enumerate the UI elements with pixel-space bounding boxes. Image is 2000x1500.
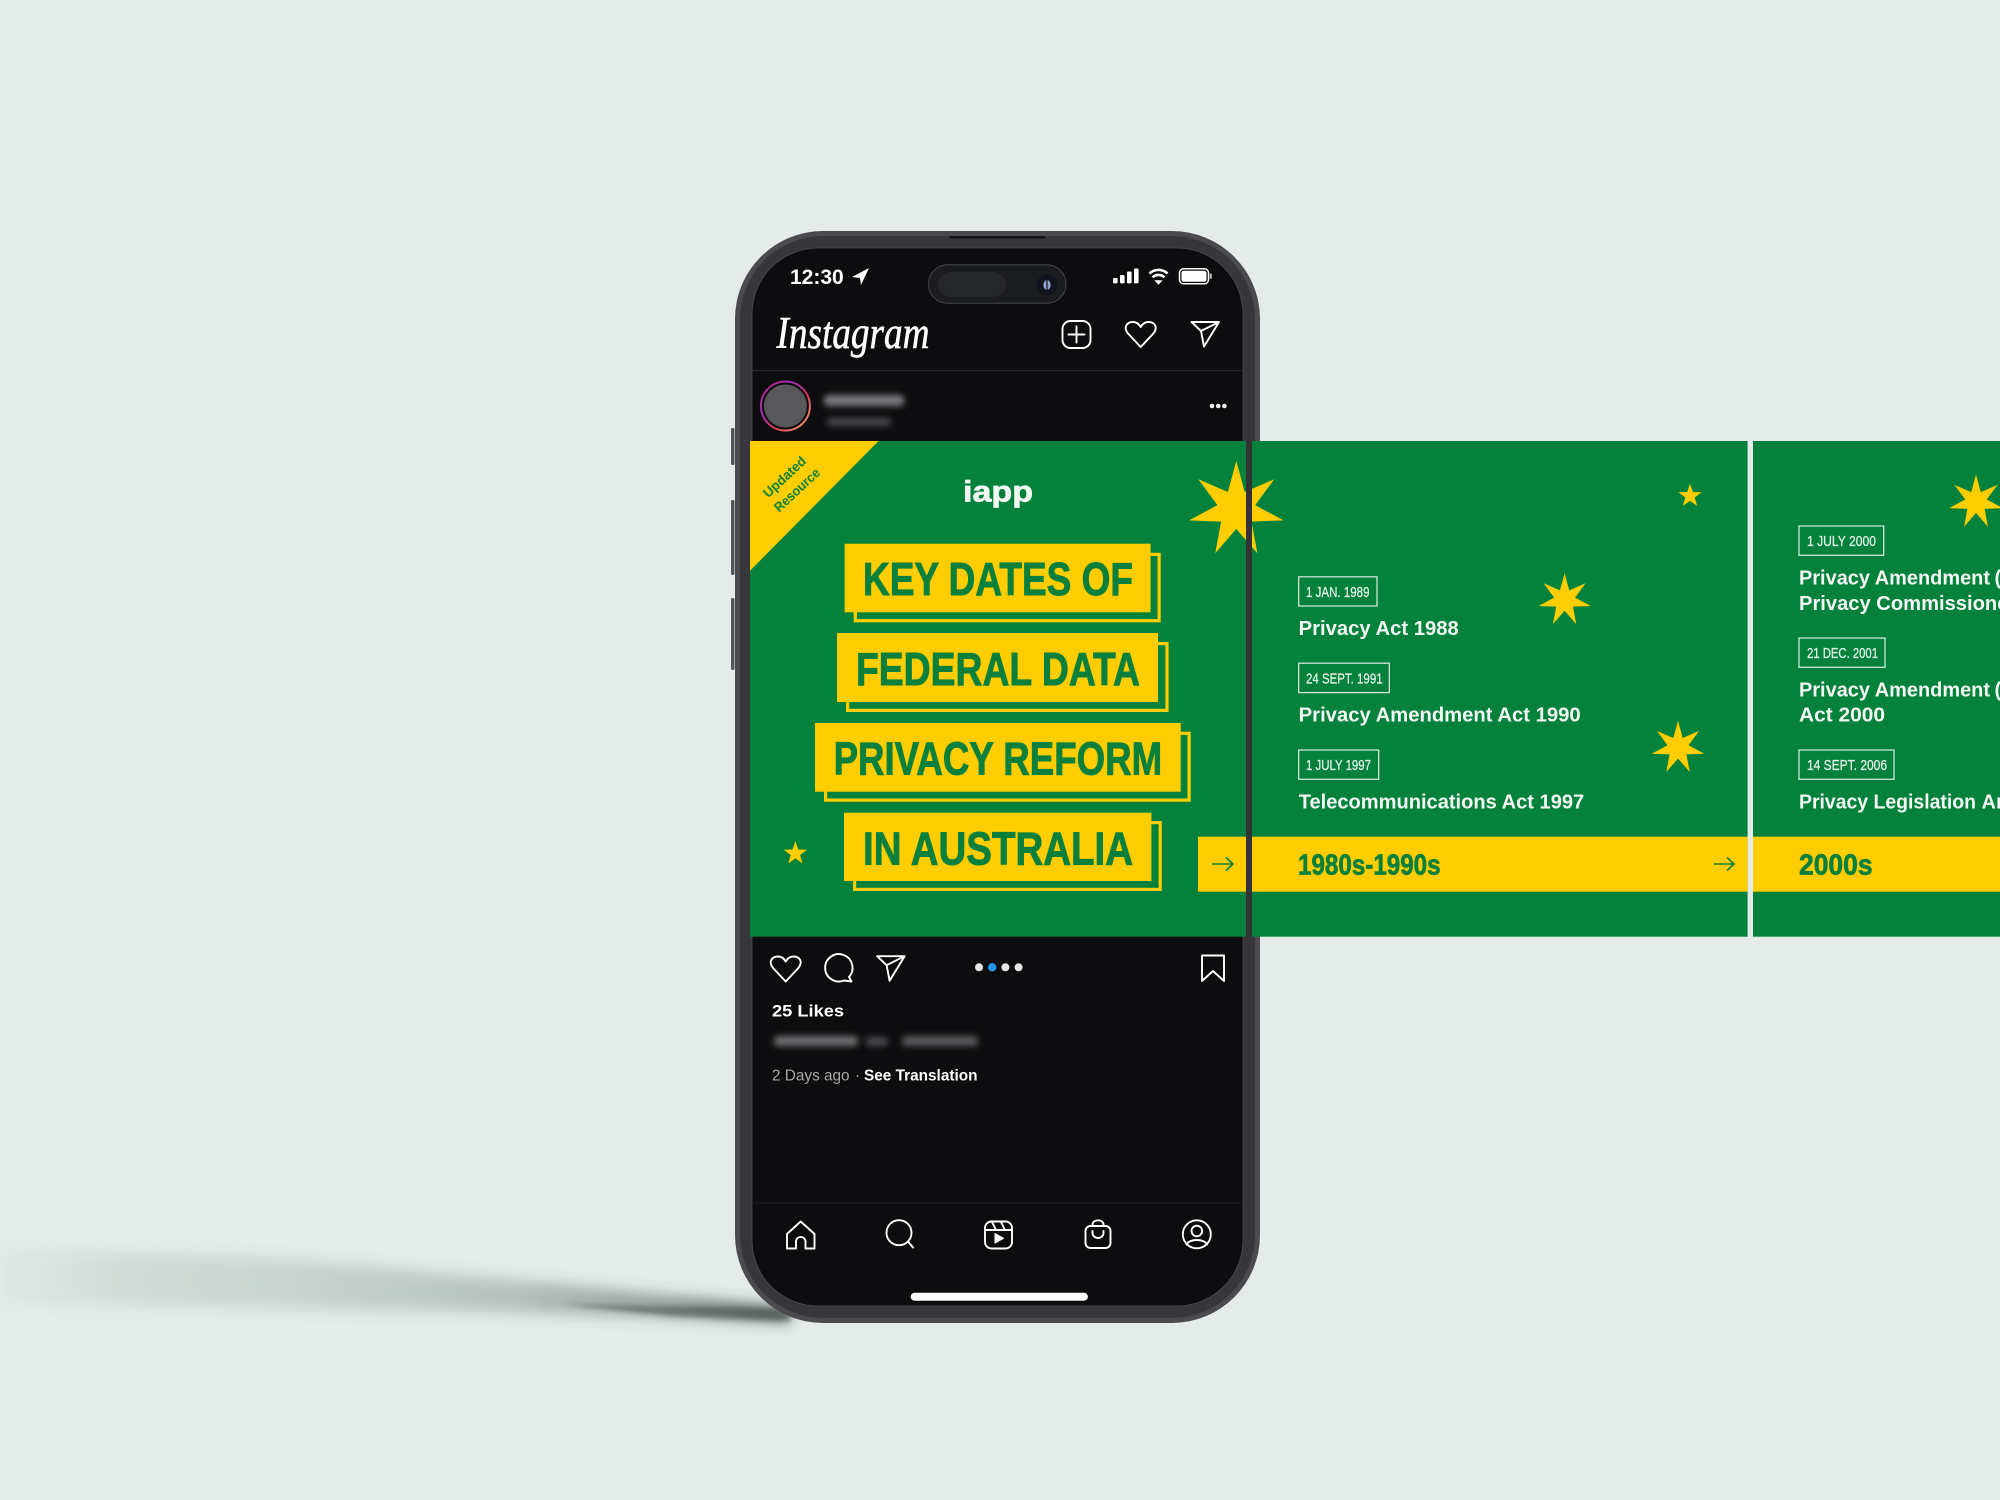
title line 1: KEY DATES OF: [863, 553, 1133, 605]
next arrow tab: [1198, 837, 1248, 892]
phone edge over post: [1246, 441, 1252, 937]
entry: 21 Dec 2001: [1799, 638, 2000, 727]
title line 1: [845, 544, 1159, 621]
title line 4: [844, 813, 1160, 889]
title line 3: [815, 723, 1189, 800]
title line 2: [837, 633, 1167, 710]
entry: 1 July 1997: 1 JULY 1997: [1306, 758, 1371, 774]
home indicator: [911, 1293, 1088, 1301]
entry: 14 Sept 2006: [1799, 750, 2000, 813]
blurred caption: [774, 1036, 978, 1046]
icon: bookmark: [1202, 956, 1224, 981]
entry: 1 Jan 1989: Privacy Act 1988: [1299, 618, 1459, 640]
likes count: 25 Likes: [772, 1002, 844, 1021]
icon: comment: [825, 954, 853, 982]
entry: 1 Jan 1989: [1299, 577, 1459, 640]
year ribbon: 1980s-1990s: [1298, 849, 1441, 881]
icon: add post: [1062, 321, 1090, 348]
entry: 1 July 1997: [1299, 750, 1584, 813]
icon: seven point star: [1949, 474, 2000, 527]
entry: 1 July 2000: Privacy Amendment: [1799, 567, 1990, 589]
entry: 1 Jan 1989: 1 JAN. 1989: [1306, 585, 1370, 601]
signal bars: [1113, 268, 1139, 283]
battery: [1180, 269, 1212, 284]
post timestamp: [772, 1068, 978, 1085]
entry: 14 Sept 2006: Privacy Legislation: [1799, 791, 1976, 813]
clock: 12:30: [790, 266, 844, 289]
title line 2: FEDERAL DATA: [856, 643, 1140, 695]
entry: 1 July 2000: [1799, 526, 2000, 615]
entry: 1 July 1997: Telecommunications Act 1997: [1299, 791, 1584, 813]
icon: send: [1192, 322, 1219, 346]
updated resource corner: Updated: [760, 453, 809, 501]
dynamic island: [928, 265, 1066, 303]
entry: 21 Dec 2001: Privacy Amendment: [1799, 680, 1990, 702]
icon: small star: [1678, 484, 1702, 506]
icon: search: [886, 1220, 913, 1248]
icon: seven point star: [1538, 573, 1591, 624]
carousel panel 3: 2000s: [1753, 441, 2000, 937]
post timestamp: See Translation: [864, 1068, 978, 1085]
phone body: [731, 231, 1260, 1323]
post author row: [761, 382, 1227, 430]
entry: 21 Dec 2001: Act 2000: [1799, 705, 1885, 727]
year ribbon: 2000s: [1799, 849, 1873, 881]
post timestamp: 2 Days ago: [772, 1068, 850, 1085]
bottom navigation: [752, 1202, 1243, 1248]
post timestamp: ·: [855, 1068, 860, 1085]
entry: 24 Sept 1991: 24 SEPT. 1991: [1306, 671, 1383, 687]
status bar: [790, 265, 1212, 303]
title line 4: IN AUSTRALIA: [863, 822, 1133, 874]
more menu dots: [1210, 404, 1227, 408]
iapp logo: iapp: [963, 476, 1033, 509]
carousel panel 2: 1980s-1990s: [1248, 441, 1748, 937]
icon: home: [787, 1222, 814, 1248]
icon: reels: [985, 1222, 1012, 1248]
location arrow: [852, 268, 869, 285]
year ribbon: [1248, 837, 1748, 892]
phone cast shadow: [0, 1248, 790, 1321]
entry: 14 Sept 2006: 14 SEPT. 2006: [1807, 758, 1887, 774]
icon: shop bag: [1086, 1220, 1110, 1248]
avatar: [761, 382, 810, 430]
post action row: [771, 954, 1224, 982]
year ribbon: [1753, 837, 2000, 892]
icon: share: [877, 956, 905, 981]
entry: 24 Sept 1991: Privacy Amendment Act 1990: [1299, 705, 1581, 727]
entry: 21 Dec 2001: 21 DEC. 2001: [1807, 646, 1878, 662]
icon: like: [771, 956, 801, 982]
carousel panel 1: cover: [750, 441, 1248, 937]
updated resource corner: Resource: [771, 465, 823, 515]
updated resource corner: [750, 441, 879, 571]
carousel dots: [975, 963, 1023, 972]
icon: small star: [784, 841, 807, 863]
blurred username: [824, 395, 904, 426]
entry: 24 Sept 1991: [1299, 663, 1581, 727]
instagram header: [752, 308, 1243, 371]
icon: heart: [1126, 322, 1156, 347]
icon: large seven point star: [1189, 461, 1284, 553]
instagram wordmark: Instagram: [776, 308, 930, 358]
icon: seven point star: [1652, 721, 1704, 772]
title line 3: PRIVACY REFORM: [834, 732, 1162, 784]
entry: 1 July 2000: 1 JULY 2000: [1807, 534, 1876, 550]
side buttons: [731, 428, 734, 670]
icon: profile: [1183, 1220, 1211, 1248]
wifi: [1150, 270, 1168, 284]
